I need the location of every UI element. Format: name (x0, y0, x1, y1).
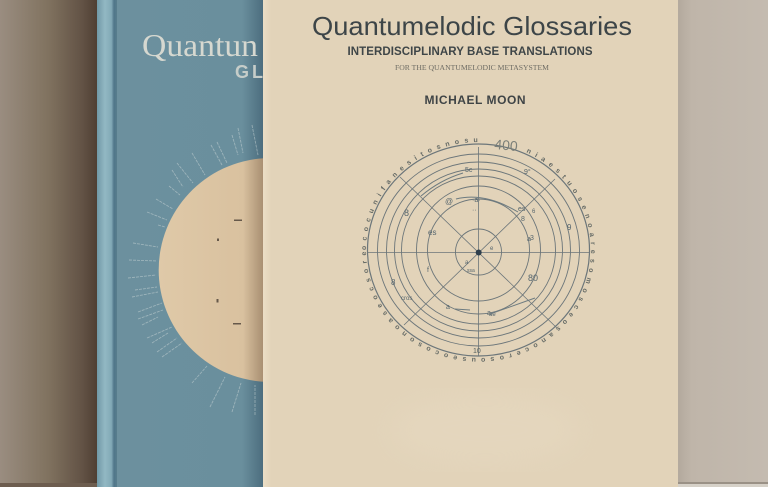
scattered symbols: 9° (524, 168, 531, 176)
book spine (97, 0, 117, 487)
outer ring text, right arc: n i a e s t u o s e n o a r e s o m o s c e o s a n o c e r o s o u s e o c o s o n o a s e o c s o r e n o s o a c u s e n i (362, 149, 595, 362)
scattered symbols: f (427, 267, 429, 274)
tan circle on blue cover (159, 158, 264, 382)
centre hub (476, 250, 482, 256)
scattered symbols: ssa (467, 268, 475, 274)
scattered symbols: a (487, 310, 491, 317)
scattered symbols: 5c (465, 167, 473, 174)
scattered symbols: 8 (404, 208, 409, 218)
scattered symbols: 9 (567, 223, 572, 232)
scattered symbols: es (518, 206, 526, 213)
outer ring text, left arc: o c o c u n i f a n e s i t o s n o s u (362, 138, 478, 250)
author: MICHAEL MOON (424, 93, 526, 107)
numeral 10: 10 (473, 348, 481, 355)
back book: blue cover (97, 0, 266, 487)
scattered symbols: 3 (530, 235, 534, 242)
spokes (367, 147, 590, 356)
title: Quantumelodic Glossaries (312, 11, 632, 41)
shelf edge (0, 482, 768, 487)
ring arcs (421, 173, 535, 314)
scattered symbols: 8 (391, 278, 396, 287)
scattered symbols: @ (445, 197, 453, 206)
scattered symbols: 8 (521, 216, 525, 223)
numeral 400: 400 (494, 136, 519, 154)
blue cover panel (117, 0, 264, 487)
scattered symbols: a (446, 304, 450, 311)
scattered symbols: ·· (472, 207, 477, 214)
blue cover title: Quantun (142, 27, 258, 63)
ring numerals and glyph text (362, 136, 595, 362)
scattered symbols: a (527, 236, 531, 243)
subtitle: INTERDISCIPLINARY BASE TRANSLATIONS (348, 46, 593, 58)
scattered symbols: ae (489, 312, 496, 318)
scattered symbols (391, 167, 572, 318)
scattered symbols: ·a· (472, 197, 481, 204)
scattered symbols: 6 (532, 209, 536, 215)
tagline: FOR THE QUANTUMELODIC METASYSTEM (395, 64, 550, 72)
cover panel (263, 0, 678, 487)
circular diagram (362, 136, 595, 362)
scattered symbols: 80 (528, 273, 538, 283)
scattered symbols: e (490, 246, 494, 252)
blue cover subtitle: GL (235, 62, 266, 82)
cover highlight (390, 395, 580, 465)
rings (368, 144, 590, 356)
radial label marks (128, 125, 258, 415)
scattered symbols: cros (401, 296, 412, 302)
scattered symbols: a (465, 260, 469, 266)
small marks in circle (216, 220, 242, 324)
scattered symbols: es (428, 228, 436, 237)
